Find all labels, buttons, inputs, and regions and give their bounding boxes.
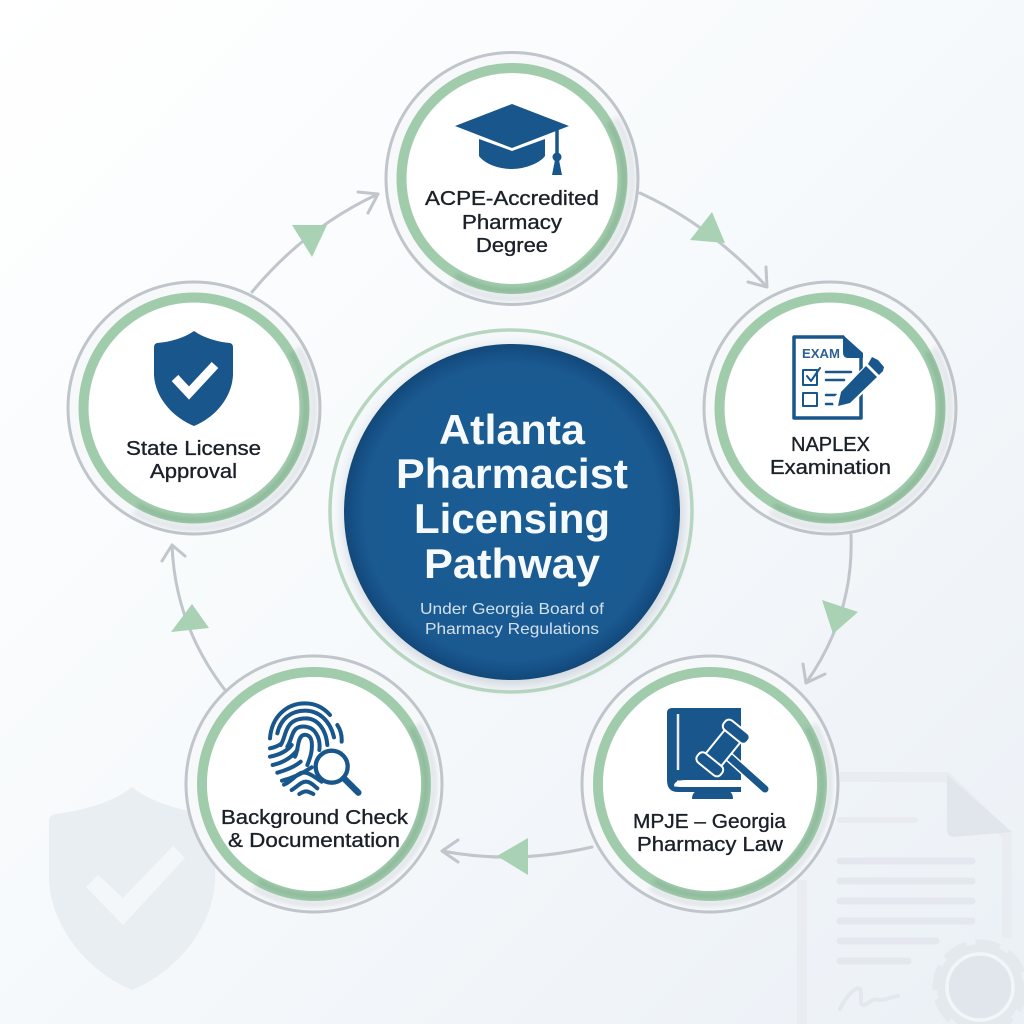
arrow: background check to state license (162, 545, 225, 690)
label: Approval (150, 461, 237, 483)
label: State License (126, 438, 261, 460)
icon: exam sheet and pencil (794, 335, 884, 418)
step: Background Check and Documentation (186, 656, 442, 912)
title: Atlanta (439, 406, 586, 453)
arrow: state license to degree (252, 192, 378, 292)
label: Examination (770, 457, 891, 479)
watermark: shield (49, 787, 215, 990)
center hub: Pharmacist (396, 450, 628, 497)
label: NAPLEX (791, 434, 870, 456)
step: State License Approval (68, 282, 320, 534)
step: MPJE Georgia Pharmacy Law (582, 656, 838, 912)
icon: graduation cap (455, 104, 569, 175)
label: Background Check (221, 807, 409, 829)
center hub (330, 330, 692, 692)
label: Pharmacy Law (637, 834, 784, 856)
label: & Documentation (228, 830, 400, 852)
arrow: degree to NAPLEX (640, 193, 767, 287)
center hub: Pathway (424, 540, 601, 587)
label: Degree (476, 235, 548, 257)
center blue disc (344, 344, 680, 680)
icon: fingerprint and magnifier (270, 703, 358, 794)
arrow: NAPLEX to MPJE (803, 535, 858, 683)
label: ACPE-Accredited (425, 188, 599, 210)
icon: exam sheet and pencil: EXAM (802, 347, 840, 361)
label: MPJE – Georgia (633, 811, 787, 833)
arrow: MPJE to background check (442, 838, 592, 875)
step: ACPE-Accredited Pharmacy Degree (386, 52, 638, 304)
subtitle: Pharmacy Regulations (425, 621, 599, 638)
subtitle: Under Georgia Board of (420, 601, 605, 618)
step: NAPLEX Examination (704, 282, 956, 534)
center hub: Licensing (414, 495, 610, 542)
icon: law book and gavel (667, 708, 766, 799)
watermark: certificate document (836, 775, 1024, 1024)
label: Pharmacy (462, 212, 562, 234)
icon: shield with check (154, 331, 233, 426)
